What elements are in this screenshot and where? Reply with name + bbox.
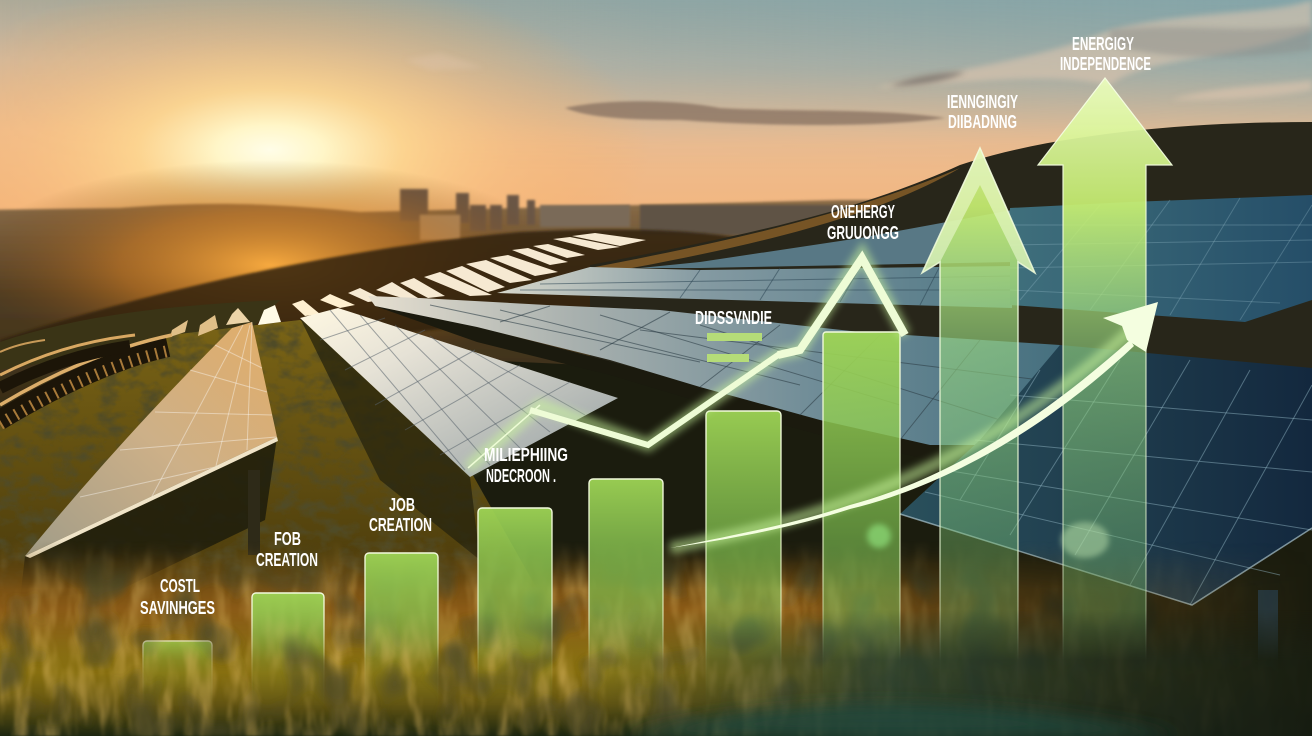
label: cost savings: COSTL bbox=[160, 576, 200, 596]
bar 3 bbox=[365, 553, 438, 710]
panel: large foreground dark solar array bbox=[900, 345, 1312, 680]
label: energy independence: INDEPENDENCE bbox=[1060, 54, 1151, 74]
label: energy independence bbox=[1060, 34, 1151, 74]
bar chart: rising translucent green bars bbox=[143, 332, 900, 722]
bar 2 bbox=[252, 593, 324, 708]
arrow line: curved growth trend bbox=[670, 302, 1158, 548]
ground: grass between panels bbox=[0, 320, 1312, 736]
label: bar 4: MILIEPHIING bbox=[484, 445, 568, 465]
label: bar 4 bbox=[484, 445, 568, 486]
cloud band bbox=[565, 101, 945, 125]
panel: upper middle solar array bbox=[497, 210, 1012, 308]
label: energy independence: ENERGIGY bbox=[1072, 34, 1134, 54]
label: job creation 2 bbox=[369, 495, 432, 535]
panel: long mid solar array bbox=[368, 296, 1060, 460]
arrow bar: energy building bbox=[922, 148, 1035, 725]
background: sunset sky bbox=[0, 0, 1312, 325]
label: energy growing: ONEHERGY bbox=[831, 202, 895, 222]
bar 4 bbox=[478, 508, 552, 712]
panel: centre solar array bbox=[300, 308, 618, 477]
bar 1: cost savings bbox=[143, 641, 212, 706]
label: job creation 2: JOB bbox=[389, 495, 415, 515]
label: energy building: IENNGINGIY bbox=[947, 92, 1018, 112]
panel: far right solar array bbox=[1010, 195, 1312, 322]
label: job creation 2: CREATION bbox=[369, 515, 432, 535]
label: job creation 1: FOB bbox=[274, 529, 301, 549]
arrow line: zigzag growth trend bbox=[468, 254, 905, 468]
label: energy building bbox=[947, 92, 1018, 132]
bar 6 bbox=[706, 411, 781, 716]
label: cost savings bbox=[140, 576, 215, 618]
icon: city skyline bbox=[400, 189, 840, 240]
label: job creation 1 bbox=[256, 529, 318, 570]
panel row: distant small solar panels bbox=[170, 233, 646, 337]
label: bar 4: NDECROON . bbox=[486, 466, 556, 486]
foreground grass behind the bars bbox=[0, 543, 1246, 696]
lens flares bbox=[867, 522, 1109, 558]
bar 7 bbox=[823, 332, 900, 722]
label: bar 6: DIDSSVNDIE bbox=[695, 308, 772, 328]
small legend dashes bbox=[707, 333, 762, 362]
label: cost savings: SAVINHGES bbox=[140, 598, 215, 618]
left fence-like panel rows bbox=[0, 335, 172, 424]
label: energy building: DIIBADNNG bbox=[948, 112, 1017, 132]
near grass overlay fading the bars bbox=[0, 610, 1312, 736]
right hillside bbox=[590, 122, 1312, 420]
panel: large left solar array bbox=[25, 322, 278, 558]
distant landscape and city skyline bbox=[0, 160, 1312, 470]
label: energy growing: GRUUONGG bbox=[827, 223, 899, 243]
label: energy growing bbox=[827, 202, 899, 243]
bar 5 bbox=[589, 479, 663, 714]
arrow bar: energy independence bbox=[1038, 78, 1172, 730]
label: job creation 1: CREATION bbox=[256, 550, 318, 570]
